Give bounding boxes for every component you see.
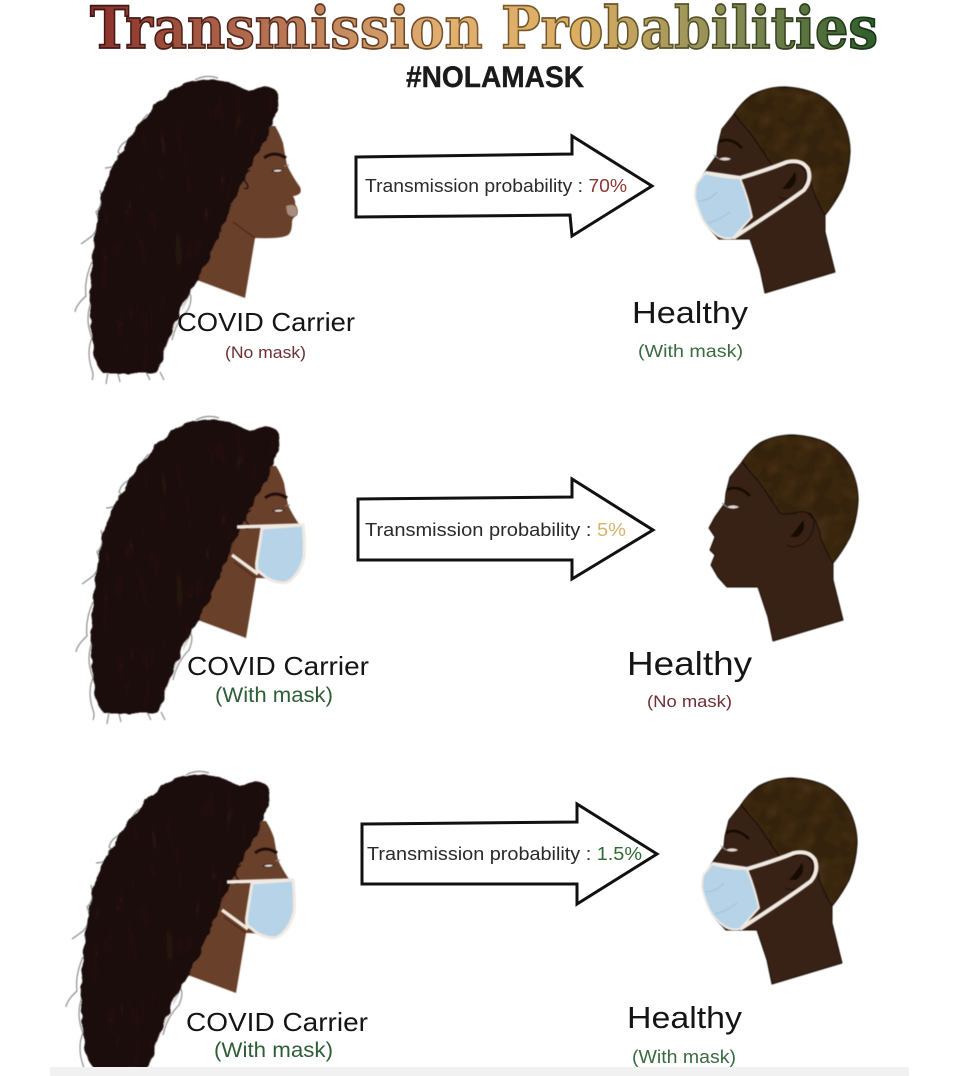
arrow: 5% probability: Transmission probability : 5% — [365, 520, 626, 540]
bottom grey band — [50, 1067, 909, 1076]
label: COVID Carrier: COVID Carrier — [186, 1007, 368, 1037]
panel: carrier with mask, healthy no mask — [76, 416, 858, 724]
arrow: 70% probability — [356, 136, 652, 236]
carrier with mask illustration — [76, 416, 304, 724]
label: no mask: (No mask) — [647, 692, 732, 711]
arrow: 5% probability — [358, 479, 653, 579]
label: with mask: (With mask) — [638, 341, 743, 361]
label: Healthy: Healthy — [627, 645, 753, 682]
label: with mask: (With mask) — [215, 684, 333, 707]
hashtag: #NOLAMASK — [406, 61, 584, 94]
label: with mask: (With mask) — [632, 1047, 736, 1067]
healthy person wearing mask illustration — [695, 87, 850, 293]
arrow: 70% probability: Transmission probability : 70% — [365, 176, 627, 196]
label: Healthy: Healthy — [632, 295, 749, 330]
carrier with mask illustration — [66, 771, 294, 1076]
label: Healthy: Healthy — [627, 1000, 743, 1035]
panel: carrier with mask, healthy with mask — [66, 771, 857, 1076]
arrow: 1.5% probability: Transmission probability : 1.5% — [367, 844, 642, 864]
healthy person wearing mask illustration — [702, 778, 857, 984]
label: no mask: (No mask) — [225, 344, 306, 362]
carrier without mask illustration — [75, 76, 301, 384]
healthy person without mask illustration — [709, 435, 858, 641]
arrow: 1.5% probability — [362, 804, 657, 904]
label: COVID Carrier: COVID Carrier — [177, 307, 355, 337]
label: COVID Carrier: COVID Carrier — [187, 651, 369, 681]
label: with mask: (With mask) — [214, 1039, 333, 1062]
panel: carrier no mask, healthy with mask — [75, 76, 850, 384]
